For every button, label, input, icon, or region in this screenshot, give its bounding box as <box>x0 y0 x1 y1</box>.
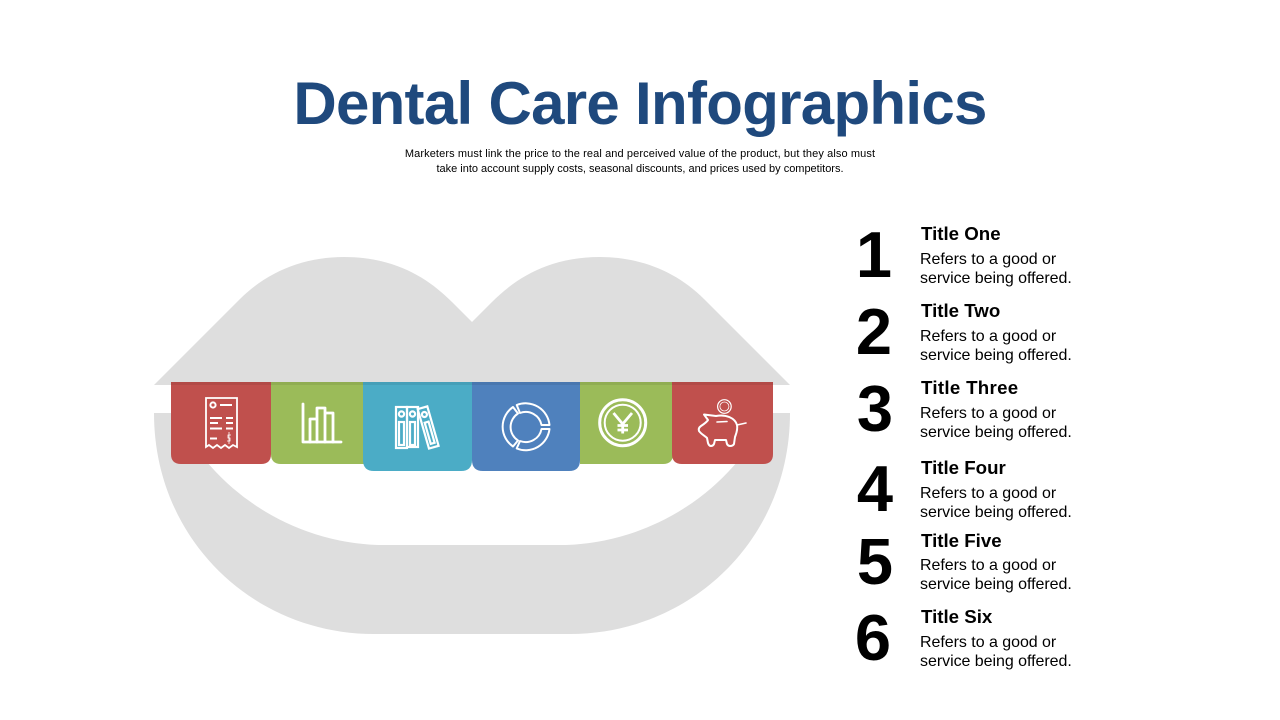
item 2: Refers to a good or <box>920 328 1056 345</box>
item 6 <box>855 601 1072 674</box>
icon: receipt <box>206 398 237 448</box>
tab overlap band with upper lip <box>171 382 773 385</box>
item 5: Title Five <box>921 530 1002 551</box>
tab 2: bar chart <box>271 382 364 464</box>
item 2: 2 <box>856 295 892 368</box>
item 4 <box>857 452 1072 525</box>
item 3: Refers to a good or <box>920 405 1056 422</box>
item 2 <box>856 295 1072 368</box>
item 5: Refers to a good or <box>920 557 1056 574</box>
item 6: Title Six <box>921 606 992 627</box>
lower lip <box>154 413 790 634</box>
tab 5: yen coin <box>580 382 673 464</box>
subtitle text: take into account supply costs, seasonal discounts, and prices used by competitors. <box>436 163 844 175</box>
icon: bar chart <box>303 404 341 442</box>
item 1: Refers to a good or <box>920 251 1056 268</box>
subtitle text: Marketers must link the price to the real and perceived value of the product, but they also must <box>405 148 875 160</box>
item 6: Refers to a good or <box>920 634 1056 651</box>
item 3: 3 <box>857 372 893 445</box>
icon: ring chart <box>503 403 550 450</box>
tab 4: ring chart <box>472 382 580 471</box>
item 3: Title Three <box>921 377 1018 398</box>
icon: binders <box>396 406 439 449</box>
item 2: Title Two <box>921 300 1000 321</box>
title: Dental Care Infographics <box>293 70 987 137</box>
item 1 <box>856 218 1072 291</box>
upper lip <box>154 257 790 385</box>
item 1: service being offered. <box>920 270 1072 287</box>
subtitle text <box>405 148 875 175</box>
item 5 <box>857 525 1072 598</box>
item 4: Refers to a good or <box>920 485 1056 502</box>
item 1: 1 <box>856 218 892 291</box>
item 6: service being offered. <box>920 653 1072 670</box>
tab 3: binders <box>363 382 472 471</box>
item 4: service being offered. <box>920 504 1072 521</box>
tab 6: piggy bank <box>672 382 773 464</box>
item 6: 6 <box>855 601 891 674</box>
icon: yen coin <box>600 400 646 446</box>
item 3: service being offered. <box>920 424 1072 441</box>
item 1: Title One <box>921 223 1001 244</box>
tab 1: receipt <box>171 382 271 464</box>
item 4: Title Four <box>921 457 1006 478</box>
item 3 <box>857 372 1072 445</box>
icon: piggy bank <box>699 400 746 446</box>
item 5: 5 <box>857 525 893 598</box>
item 4: 4 <box>857 452 893 525</box>
item 2: service being offered. <box>920 347 1072 364</box>
item 5: service being offered. <box>920 576 1072 593</box>
